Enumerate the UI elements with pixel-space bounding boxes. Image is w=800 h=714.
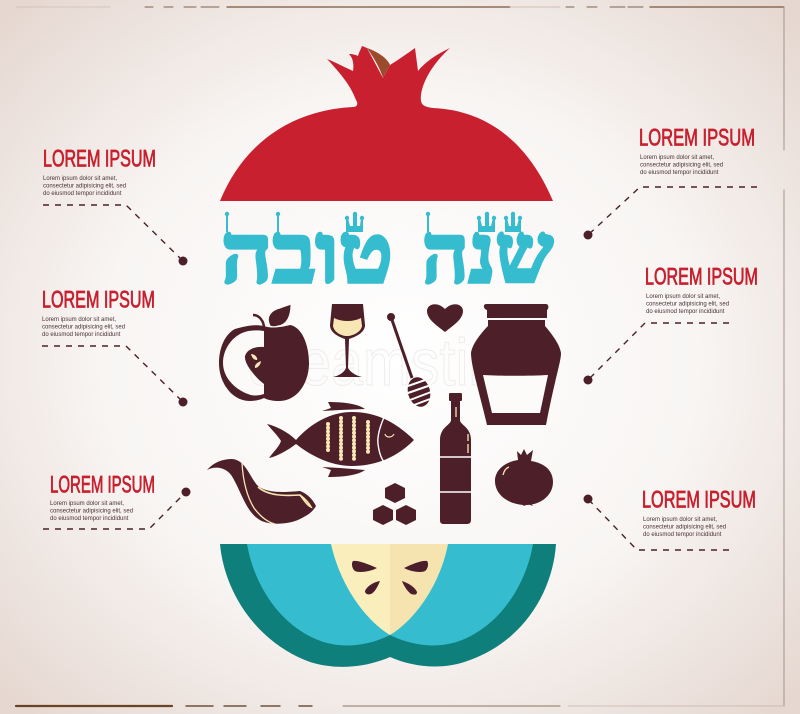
pomegranate top <box>220 46 553 201</box>
callout: right middle: consectetur adipisicing elit, sed <box>646 302 729 308</box>
callout: left top: do eiusmod tempor incididunt <box>43 191 122 197</box>
word: shana: שנה <box>422 209 553 300</box>
watermark: dreamstime <box>248 325 548 399</box>
callout: right bottom: do eiusmod tempor incididunt <box>643 532 722 538</box>
callout: right top: Lorem ipsum dolor sit amet, <box>640 155 714 161</box>
icon: fish <box>267 402 414 477</box>
callout: left top: Lorem ipsum dolor sit amet, <box>43 176 117 182</box>
callout: left bottom: LOREM IPSUM <box>50 472 155 498</box>
callout: left middle: do eiusmod tempor incididunt <box>42 332 121 338</box>
apple core right <box>390 544 448 635</box>
apple seeds <box>352 561 428 595</box>
callout: left bottom: Lorem ipsum dolor sit amet, <box>50 501 124 507</box>
word: tova: טובה <box>221 209 393 300</box>
icon: bottle <box>440 393 471 524</box>
callout: right middle <box>584 264 758 384</box>
apple bottom <box>220 544 556 667</box>
callout: left middle: consectetur adipisicing elit, sed <box>42 324 125 330</box>
callout: left bottom: consectetur adipisicing elit, sed <box>50 508 133 514</box>
callout: left top: consectetur adipisicing elit, sed <box>43 184 126 190</box>
crowns on letters <box>225 212 522 232</box>
callout: left top <box>43 146 188 266</box>
callout: right bottom <box>584 486 756 550</box>
callout: right top: consectetur adipisicing elit, sed <box>640 162 723 168</box>
callout: right bottom: Lorem ipsum dolor sit amet, <box>643 517 717 523</box>
crown stem <box>367 48 390 78</box>
icon: apple <box>219 304 309 401</box>
callout: right middle: Lorem ipsum dolor sit amet, <box>646 294 720 300</box>
callout: right bottom: consectetur adipisicing elit, sed <box>643 524 726 530</box>
callout: left middle <box>42 286 188 406</box>
callout: right top <box>584 124 757 240</box>
icon: small pomegranate <box>495 449 553 506</box>
icon: wine glass <box>330 304 365 377</box>
callout: left middle: Lorem ipsum dolor sit amet, <box>42 317 116 323</box>
icon: shofar <box>207 459 316 524</box>
hebrew title <box>221 209 553 300</box>
callout: right top: do eiusmod tempor incididunt <box>640 170 719 176</box>
callout: right middle: do eiusmod tempor incididunt <box>646 309 725 315</box>
callout: left top: LOREM IPSUM <box>43 146 156 172</box>
icon: honey dipper <box>387 313 434 409</box>
callout: left bottom <box>43 472 190 529</box>
callout: left middle: LOREM IPSUM <box>42 286 155 314</box>
apple core left <box>331 544 390 635</box>
icon: heart <box>427 304 463 332</box>
apple flesh <box>247 544 533 645</box>
icon: honey jar <box>471 304 561 425</box>
callout: left bottom: do eiusmod tempor incididunt <box>50 516 129 522</box>
icon: honeycomb <box>373 483 416 525</box>
